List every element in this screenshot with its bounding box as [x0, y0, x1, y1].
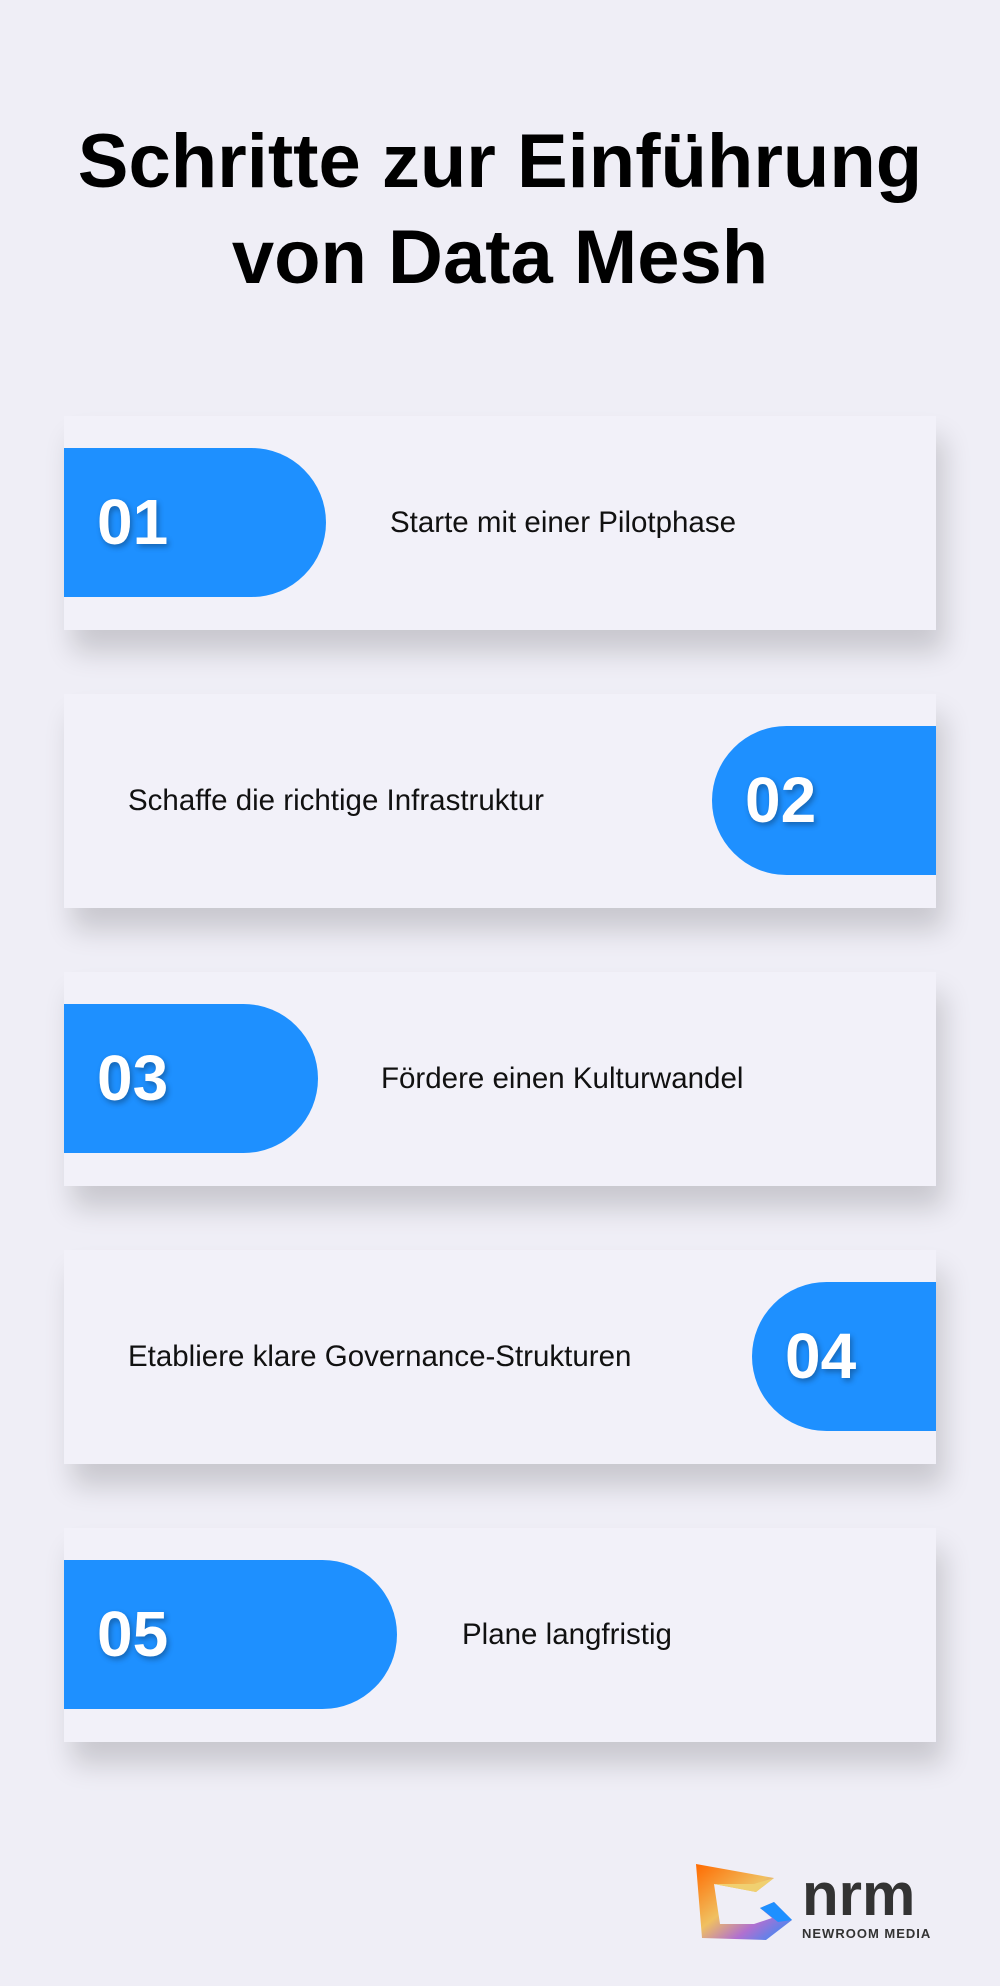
- pill 05: [64, 1560, 397, 1709]
- text 04: Etabliere klare Governance-Strukturen: [128, 1340, 631, 1373]
- pill 01: 01: [97, 486, 168, 558]
- pill 01: [64, 448, 326, 597]
- pill 04: 04: [785, 1320, 856, 1392]
- title: Schritte zur Einführung: [78, 119, 922, 204]
- text 01: Starte mit einer Pilotphase: [390, 506, 736, 539]
- logo text: nrm: [802, 1861, 915, 1928]
- pill 03: 03: [97, 1042, 168, 1114]
- logo: NEWROOM MEDIA: [802, 1926, 931, 1941]
- text 03: Fördere einen Kulturwandel: [381, 1062, 743, 1095]
- title: [78, 119, 922, 300]
- pill 02: [712, 726, 936, 875]
- card 04: [64, 1250, 936, 1464]
- icon: logo mark: [696, 1864, 792, 1940]
- logo: [696, 1861, 931, 1941]
- pill 03: [64, 1004, 318, 1153]
- pill 04: [752, 1282, 936, 1431]
- card 05: [64, 1528, 936, 1742]
- title: von Data Mesh: [232, 215, 768, 300]
- card 03: [64, 972, 936, 1186]
- text 02: Schaffe die richtige Infrastruktur: [128, 784, 544, 817]
- text 05: Plane langfristig: [462, 1618, 672, 1651]
- pill 05: 05: [97, 1598, 168, 1670]
- card 01: [64, 416, 936, 630]
- card 02: [64, 694, 936, 908]
- pill 02: 02: [745, 764, 816, 836]
